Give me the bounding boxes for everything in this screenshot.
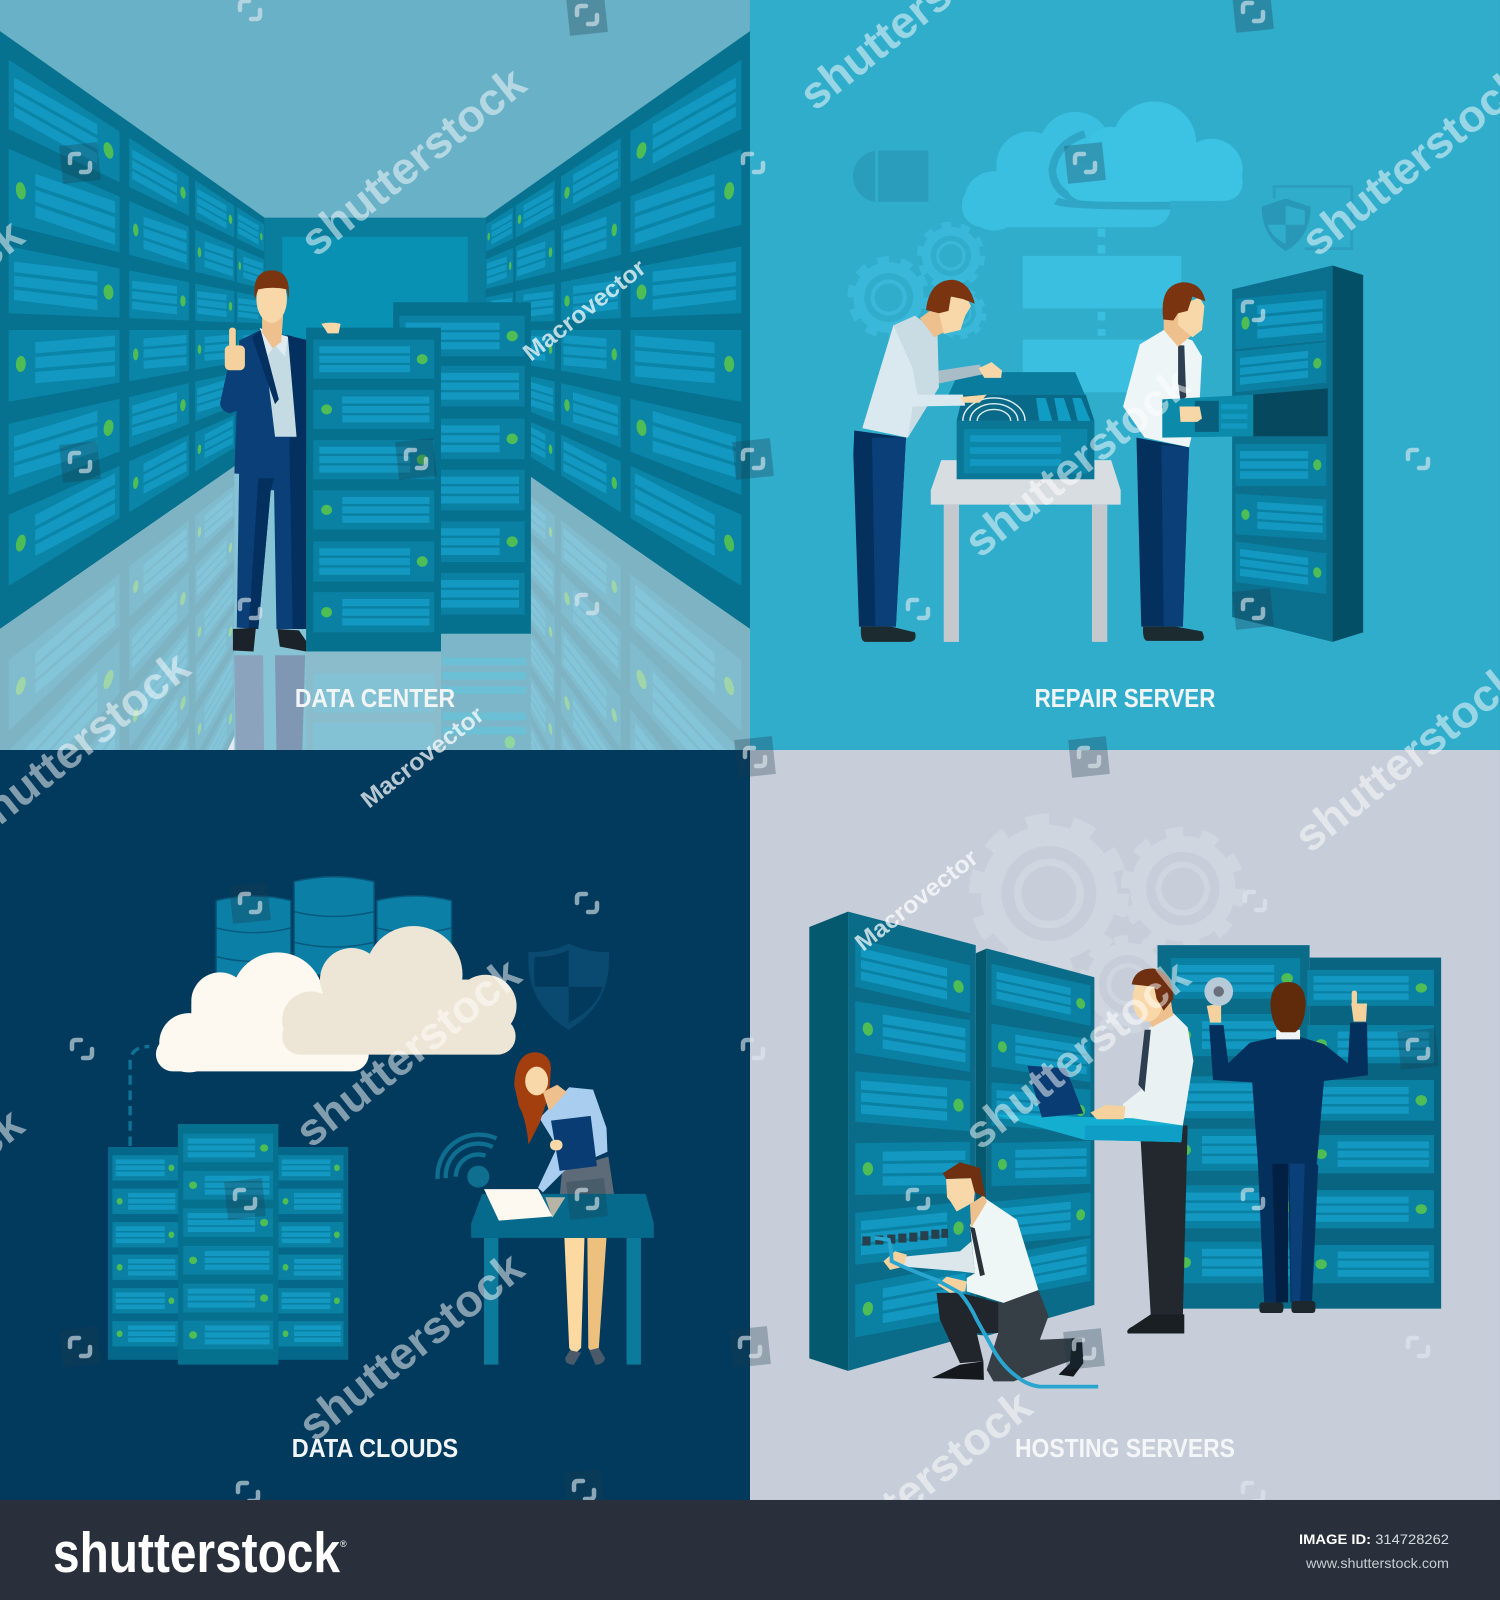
watermarks: Macrovector	[850, 844, 983, 957]
man pulling drawer	[1123, 282, 1253, 641]
icon: shield	[1262, 187, 1352, 251]
watermarks: shutterstock	[290, 56, 536, 266]
image id: IMAGE ID: 314728262	[1299, 1531, 1449, 1547]
panel: repair server	[750, 0, 1500, 750]
icon: database cylinders	[216, 877, 452, 977]
beige cloud	[282, 926, 517, 1055]
man in suit seen from back	[1204, 977, 1368, 1313]
panel: data center	[0, 0, 750, 750]
back server rack	[383, 302, 531, 634]
title: repair server: REPAIR SERVER	[1035, 685, 1216, 713]
watermarks: shutterstock	[288, 1241, 534, 1451]
icon: wifi	[438, 1135, 496, 1188]
background gears	[977, 822, 1239, 1028]
table with laptop	[471, 1189, 654, 1365]
footer logo: shutterstock	[53, 1521, 340, 1585]
large left server rack	[809, 912, 976, 1371]
right server wall	[485, 31, 750, 629]
man with thumb up	[220, 270, 341, 651]
front server rack	[306, 328, 441, 651]
dashed connector	[130, 1047, 149, 1146]
watermarks: Macrovector	[356, 701, 489, 814]
left server wall	[0, 31, 264, 629]
footer bar	[0, 1500, 1500, 1600]
panel: data clouds	[0, 750, 750, 1500]
panel: hosting servers	[750, 750, 1500, 1500]
woman at table	[514, 1052, 614, 1365]
watermarks: Macrovector	[518, 254, 651, 367]
icon: disk drive	[853, 151, 928, 202]
watermarks: shutterstock	[954, 357, 1200, 567]
man reflection	[234, 655, 305, 750]
man leaning over server	[853, 280, 1002, 642]
reflective floor	[0, 466, 750, 750]
ports on rack	[862, 1229, 948, 1246]
table with open server	[931, 372, 1121, 642]
watermarks: shutterstock	[285, 947, 531, 1157]
back right server racks	[1158, 945, 1441, 1309]
title: data center: DATA CENTER	[295, 685, 455, 713]
title: hosting servers: HOSTING SERVERS	[1015, 1435, 1235, 1463]
back wall	[264, 218, 485, 485]
watermarks: shutterstock	[954, 949, 1200, 1159]
icon: gears	[852, 225, 984, 336]
laptop on shelf	[994, 1066, 1183, 1142]
icon: shield	[528, 944, 609, 1030]
watermarks: shutterstock	[796, 1379, 1042, 1589]
registered mark: ®	[340, 1539, 347, 1549]
second server rack	[976, 948, 1094, 1336]
kneeling man with cable	[875, 1162, 1098, 1387]
title: data clouds: DATA CLOUDS	[292, 1435, 458, 1463]
server rack with open drawer	[1232, 265, 1363, 642]
server stack	[108, 1124, 348, 1365]
background clouds and network icons	[852, 101, 1352, 392]
white cloud	[156, 952, 369, 1072]
standing man	[1123, 969, 1193, 1334]
website: www.shutterstock.com	[1305, 1555, 1449, 1571]
